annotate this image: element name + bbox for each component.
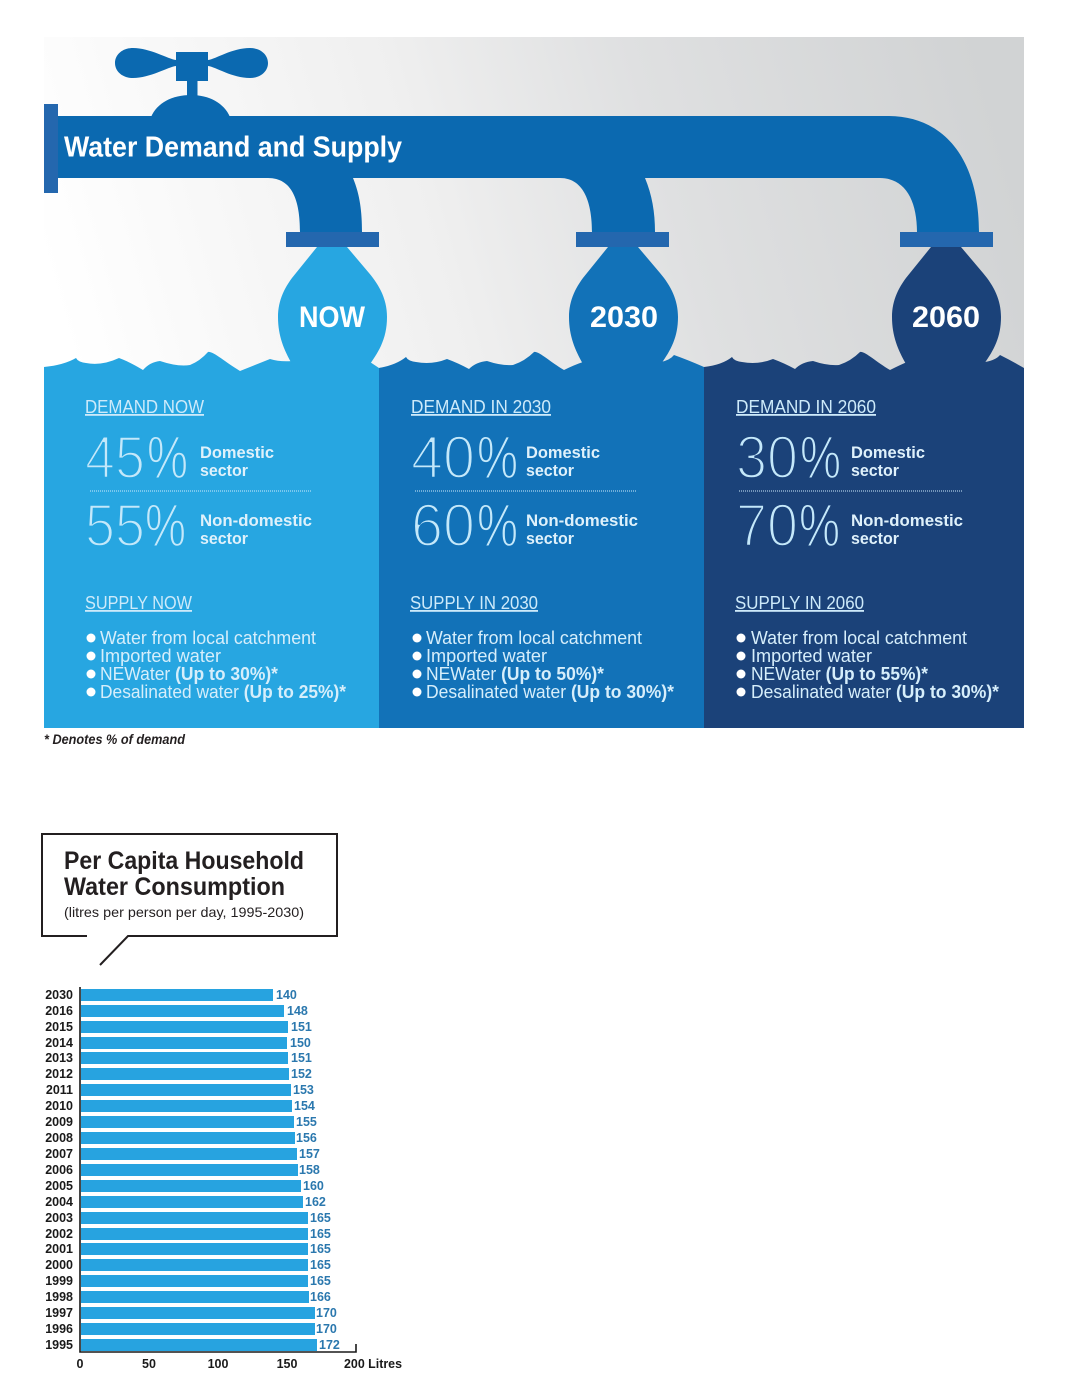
stat: 70% non-domestic: % [799, 492, 840, 559]
stat: 40% domestic: % [477, 424, 518, 491]
water wave: 2060 [704, 352, 1024, 728]
bar chart: per capita consumption: 155 [296, 1115, 317, 1129]
bar chart: per capita consumption: 2002 [45, 1227, 73, 1241]
bar chart: per capita consumption: 2010 [45, 1099, 73, 1113]
water drop: now: NOW [299, 301, 366, 334]
stat: 55% non-domestic: % [145, 492, 186, 559]
grey gradient backdrop [44, 37, 1024, 372]
pipe with three spouts [58, 116, 979, 232]
panel: 2030 [379, 352, 704, 728]
title: Water Demand and Supply [64, 132, 402, 164]
bar chart: per capita consumption: 2016 [45, 1004, 73, 1018]
label: non-domestic sector [526, 511, 638, 548]
bar chart: per capita consumption: 2007 [45, 1147, 73, 1161]
pipe end flange [44, 104, 58, 193]
spout flange: 2030 [576, 232, 669, 247]
supply list: 2030: NEWater (Up to 50%)* [426, 664, 604, 684]
bar chart: per capita consumption: 165 [310, 1211, 331, 1225]
divider: 2030 [415, 490, 637, 492]
bar chart: per capita consumption: 156 [296, 1131, 317, 1145]
bar chart: per capita consumption: 150 [290, 1036, 311, 1050]
stat: 45% domestic [85, 424, 188, 491]
spout flange: 2060 [900, 232, 993, 247]
label: domestic sector: sector [526, 461, 574, 480]
supply list: 2060: Water from local catchment [751, 628, 967, 648]
label: non-domestic sector [200, 511, 312, 548]
heading: demand in 2060: DEMAND IN 2060 [736, 397, 876, 417]
bar chart: per capita consumption: 2004 [45, 1195, 73, 1209]
divider: now [90, 490, 312, 492]
supply list: 2030: Water from local catchment [426, 628, 642, 648]
bar chart: per capita consumption: 152 [291, 1067, 312, 1081]
speech bubble heading: Water Consumption [64, 873, 285, 901]
bar chart: per capita consumption: 2003 [45, 1211, 73, 1225]
bar chart: per capita consumption [45, 987, 402, 1371]
bar chart: per capita consumption: 2009 [45, 1115, 73, 1129]
supply list: now: Desalinated water (Up to 25%)* [100, 682, 346, 702]
panel: now [44, 352, 379, 728]
supply list: 2060: Desalinated water (Up to 30%)* [751, 682, 999, 702]
stat: 40% domestic [411, 424, 518, 491]
bar chart: per capita consumption: 2005 [45, 1179, 73, 1193]
bar chart: per capita consumption: 154 [294, 1099, 315, 1113]
bar chart: per capita consumption: 2012 [45, 1067, 73, 1081]
label: domestic sector [200, 443, 274, 480]
supply list: 2060: Imported water [751, 646, 872, 666]
bar chart: per capita consumption: 2008 [45, 1131, 73, 1145]
label: domestic sector: Domestic [851, 443, 925, 462]
heading: supply now: SUPPLY NOW [85, 593, 192, 613]
heading: demand in 2030: DEMAND IN 2030 [411, 397, 551, 417]
bar chart: per capita consumption: 1999 [45, 1274, 73, 1288]
bar chart: per capita consumption: 151 [291, 1051, 312, 1065]
stat: 55% non-domestic [85, 492, 186, 559]
heading: supply in 2030: SUPPLY IN 2030 [410, 593, 538, 613]
bar chart: per capita consumption: 200 Litres [344, 1357, 402, 1371]
water wave: 2030 [379, 352, 704, 728]
label: non-domestic sector: sector [851, 529, 899, 548]
bar chart: per capita consumption: 1996 [45, 1322, 73, 1336]
speech bubble heading: Per Capita Household [64, 847, 304, 875]
bar chart: per capita consumption: 160 [303, 1179, 324, 1193]
supply list: 2060: NEWater (Up to 55%)* [751, 664, 928, 684]
bar chart: per capita consumption: 165 [310, 1242, 331, 1256]
heading: demand now: DEMAND NOW [85, 397, 204, 417]
stat: 30% domestic: % [800, 424, 841, 491]
bar chart: per capita consumption: 2030 [45, 988, 73, 1002]
stat: 30% domestic [736, 424, 841, 491]
label: non-domestic sector: Non-domestic [200, 511, 312, 530]
water drop: now [278, 247, 387, 364]
bar chart: per capita consumption: 148 [287, 1004, 308, 1018]
divider: 2060 [739, 490, 962, 492]
label: domestic sector: Domestic [526, 443, 600, 462]
label: domestic sector: sector [200, 461, 248, 480]
heading: supply in 2060: SUPPLY IN 2060 [735, 593, 864, 613]
water drop: 2060 [892, 247, 1001, 364]
bar chart: per capita consumption: 165 [310, 1227, 331, 1241]
bar chart: per capita consumption: 151 [291, 1020, 312, 1034]
panel: 2060 [704, 352, 1024, 728]
supply list: now: Imported water [100, 646, 221, 666]
supply list: now: Water from local catchment [100, 628, 316, 648]
stat: 60% non-domestic: 60 [411, 492, 475, 559]
supply list: now: NEWater (Up to 30%)* [100, 664, 278, 684]
water drop: 2060: 2060 [912, 301, 980, 334]
label: non-domestic sector: Non-domestic [851, 511, 963, 530]
bar chart: per capita consumption: 2014 [45, 1036, 73, 1050]
stat: 30% domestic: 30 [736, 424, 798, 491]
bar chart: per capita consumption: 100 [208, 1357, 228, 1371]
bar chart: per capita consumption: 2001 [45, 1242, 73, 1256]
spout flange: now [286, 232, 379, 247]
stat: 60% non-domestic [411, 492, 518, 559]
label: domestic sector: sector [851, 461, 899, 480]
bar chart: per capita consumption: 2015 [45, 1020, 73, 1034]
bar chart: per capita consumption: 50 [142, 1357, 156, 1371]
bar chart: per capita consumption: 170 [316, 1322, 337, 1336]
supply list: 2030 [412, 628, 674, 702]
bar chart: per capita consumption: 0 [77, 1357, 84, 1371]
bar chart: per capita consumption: 2011 [46, 1083, 73, 1097]
label: non-domestic sector [851, 511, 963, 548]
supply list: now [86, 628, 346, 702]
bar chart: per capita consumption: 1995 [45, 1338, 73, 1352]
bar chart: per capita consumption: 140 [276, 988, 297, 1002]
bar chart: per capita consumption: 2013 [45, 1051, 73, 1065]
bar chart: per capita consumption: 158 [299, 1163, 320, 1177]
bar chart: per capita consumption: 162 [305, 1195, 326, 1209]
speech bubble heading: (litres per person per day, 1995-2030) [64, 904, 304, 920]
stat: 70% non-domestic [736, 492, 840, 559]
label: domestic sector: Domestic [200, 443, 274, 462]
bar chart: per capita consumption: 166 [310, 1290, 331, 1304]
bar chart: per capita consumption: 2006 [45, 1163, 73, 1177]
stat: 55% non-domestic: 55 [85, 492, 145, 559]
bar chart: per capita consumption: 170 [316, 1306, 337, 1320]
water drop: 2030: 2030 [590, 301, 658, 334]
icon: tap handle [115, 48, 268, 117]
supply list: 2060 [736, 628, 999, 702]
footnote: * Denotes % of demand [44, 732, 186, 747]
label: non-domestic sector: sector [526, 529, 574, 548]
bar chart: per capita consumption: 153 [293, 1083, 314, 1097]
supply list: 2030: Desalinated water (Up to 30%)* [426, 682, 674, 702]
stat: 70% non-domestic: 70 [736, 492, 798, 559]
label: domestic sector [526, 443, 600, 480]
water wave: now [44, 352, 379, 728]
label: non-domestic sector: Non-domestic [526, 511, 638, 530]
stat: 45% domestic: 45 [85, 424, 145, 491]
bar chart: per capita consumption: 165 [310, 1274, 331, 1288]
bar chart: per capita consumption: 157 [299, 1147, 320, 1161]
bar chart: per capita consumption: 1998 [45, 1290, 73, 1304]
label: domestic sector [851, 443, 925, 480]
bar chart: per capita consumption: 150 [277, 1357, 297, 1371]
bar chart: per capita consumption: 1997 [45, 1306, 73, 1320]
water drop: 2030 [569, 247, 678, 364]
speech bubble heading [42, 834, 337, 965]
stat: 45% domestic: % [147, 424, 188, 491]
bar chart: per capita consumption: 2000 [45, 1258, 73, 1272]
stat: 60% non-domestic: % [477, 492, 518, 559]
supply list: 2030: Imported water [426, 646, 547, 666]
bar chart: per capita consumption: 165 [310, 1258, 331, 1272]
label: non-domestic sector: sector [200, 529, 248, 548]
bar chart: per capita consumption: 172 [319, 1338, 340, 1352]
stat: 40% domestic: 40 [411, 424, 475, 491]
